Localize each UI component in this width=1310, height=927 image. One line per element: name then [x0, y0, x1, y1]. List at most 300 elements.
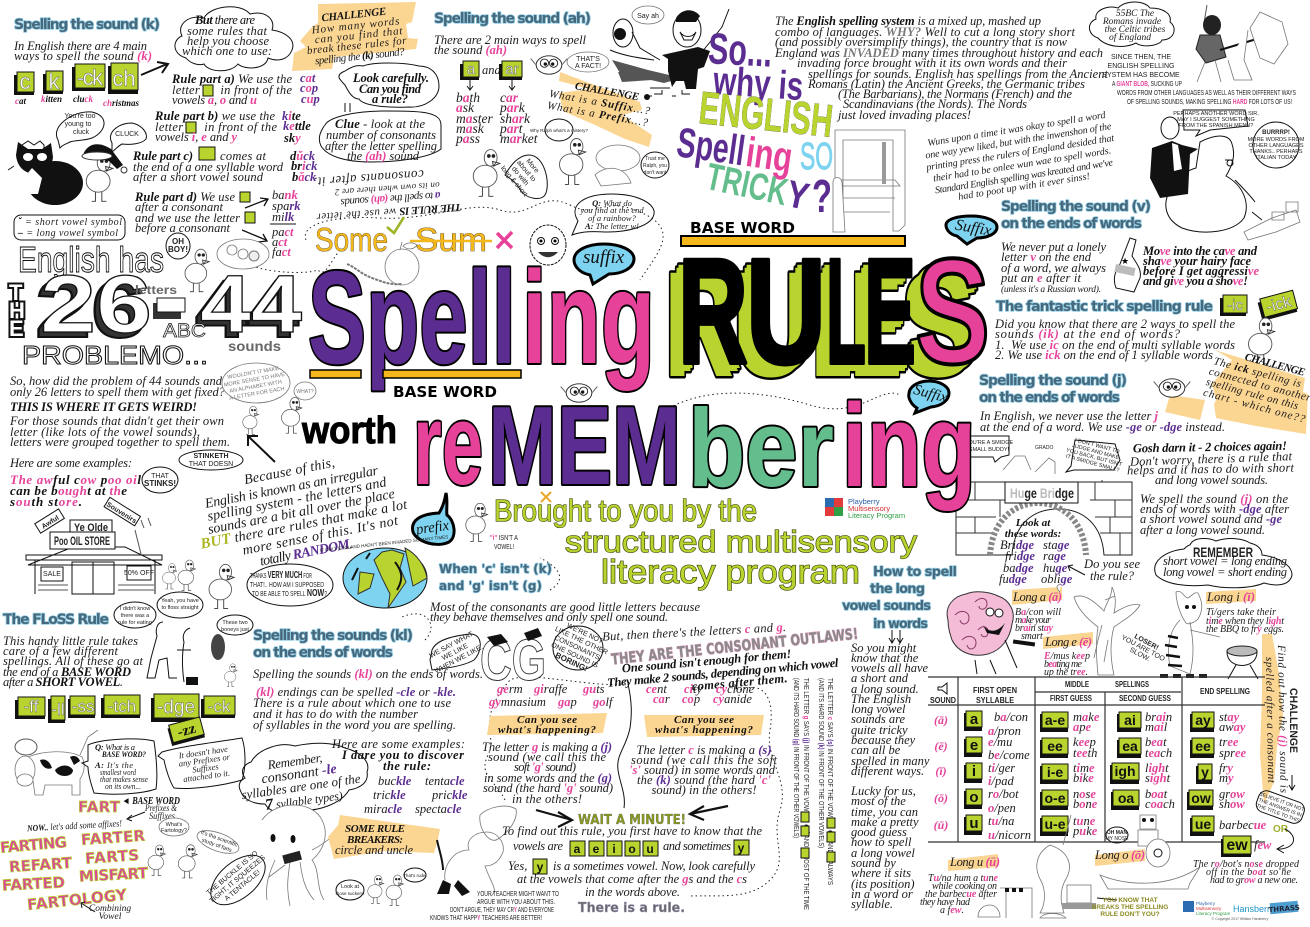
rules shadow fill: [664, 232, 983, 408]
so why is english spelling so tricky: [674, 24, 835, 222]
people and bubbles: rule for eating: [118, 620, 152, 626]
bubble: say ah: Say ah: [637, 13, 659, 20]
bubble: you're too young to cluck: You're too: [64, 113, 96, 120]
paragraph: lucky for us: time, you can: [851, 805, 918, 819]
rule part d: bank: [272, 188, 298, 202]
text: 2 ways: sounds (ik) at the end of words?: [995, 327, 1181, 341]
rules shadow fill: U: [732, 240, 812, 408]
icon: tuna chef: [978, 815, 1071, 918]
icon: chick: [209, 564, 234, 609]
rules shadow outline: S: [906, 235, 981, 403]
label: abc: ABC: [163, 321, 206, 342]
icon: robot: [1106, 815, 1158, 846]
note: i isn't a vowel: VOWEL!: [494, 544, 514, 551]
vertical: the: H: [9, 298, 25, 323]
word lists: ask: [456, 100, 475, 115]
text: 2 ways: Did you know that there are 2 ways to spell the: [994, 317, 1235, 331]
rule part a: cop: [300, 81, 318, 95]
end spelling column: OR: [1273, 824, 1289, 835]
heading: j sound: Spelling the sound (j): [979, 373, 1127, 389]
title: rememebering: [413, 379, 976, 512]
words: fart family: REFART: [8, 854, 73, 876]
text: we spell the sound j: [1140, 492, 1289, 537]
second guess column: light: [1145, 761, 1169, 775]
paragraph: because of this: more sense of this. It's not: [241, 514, 400, 559]
legend: vowel symbols: [14, 215, 125, 240]
rainbow joke bubble: [572, 194, 654, 235]
rules front: S: [915, 227, 990, 395]
long a: smart.: [1021, 631, 1045, 642]
vertical notes: (AND ITS HARD SOUND (g) IN FRONT OF THE OTHER VOWELS): [792, 678, 799, 838]
highlight: some rule breakers: BREAKERS:: [346, 834, 403, 846]
label: base word top: BASE WORD: [690, 219, 795, 237]
text: you know that: BREAKS THE SPELLING: [1092, 904, 1168, 911]
people and bubbles: to floss straight: [162, 605, 199, 611]
text: letter g: The letter g is making a (j): [482, 740, 612, 754]
text: yes y: [508, 859, 755, 899]
examples: buckle: [378, 774, 412, 788]
rule part d: before a consonant: [135, 221, 231, 235]
table headings: SECOND GUESS: [1119, 694, 1172, 703]
playberry logo: Multisensory: [848, 504, 890, 513]
key tiles: floss: -ck: [208, 697, 231, 716]
bridge with words: stage: [1043, 538, 1070, 552]
rule part a: cat: [300, 71, 316, 85]
sign: poo oil store: [50, 532, 115, 549]
bubbles above bridge: YOU'RE A SMIDGE: [965, 440, 1014, 446]
heading: j sound: [979, 373, 1127, 406]
rules shadow fill: R: [664, 240, 734, 408]
question: do you see the rule: the rule?: [1090, 569, 1135, 583]
c words: cent: [646, 682, 667, 696]
word: fart base word: [26, 796, 180, 834]
first open syllable column: ti/ger: [988, 761, 1015, 775]
how to spell long vowels: [842, 565, 957, 632]
text: kl endings: (kl) endings can be spelled -cle or -kle.: [256, 685, 456, 699]
rules shadow outline: E: [856, 235, 908, 403]
paragraph: wuns upon a time: their had to be onlee wun wae to spell words.: [932, 145, 1112, 185]
paragraph: english spelling system: (and possibly oversimplify things), the country that is now: [775, 35, 1068, 49]
bubble: clue: [319, 103, 441, 163]
icon: tiger: [1160, 591, 1220, 676]
upside-down rule text: [313, 165, 462, 223]
text: since then: SINCE THEN, THE: [1111, 54, 1171, 61]
paragraph: so you might: can all be: [851, 743, 901, 757]
heading: fantastic trick: The fantastic trick spelling rule: [996, 299, 1213, 315]
text: you know that: RULE DON'T YOU?: [1100, 911, 1160, 918]
bird and bubbles: Trust me: [645, 156, 665, 162]
example: awful cow poo oil: can be bought at the: [10, 483, 127, 498]
example words: kitten: [41, 94, 62, 104]
label: base word lower: BASE WORD: [393, 383, 497, 401]
wait a minute: [536, 806, 728, 828]
chicks and bubble: WOULDN'T IT MAKE: [227, 366, 280, 381]
long e: beating me: [1044, 659, 1083, 670]
people and bubbles: [114, 592, 253, 687]
text: letter c: the (k) sound (the hard 'c': [637, 773, 772, 787]
text: kl endings: There is a rule about which one to use: [253, 696, 451, 710]
paragraph: so you might: a long sound.: [851, 682, 919, 696]
panel: english has 26 44: [9, 239, 302, 370]
text: you know that: YOU KNOW THAT: [1102, 897, 1158, 904]
paragraph: those sounds: letter (like lots of the vowel sounds),: [10, 425, 200, 439]
second guess column: coach: [1145, 797, 1175, 811]
paragraph: how fixed: So, how did the problem of 44 sounds and: [10, 374, 223, 388]
rule part c: Rule part c): [132, 149, 193, 163]
text: letter g: sound (the hard 'g' sound): [483, 781, 613, 795]
long o: Long o (ō): [1094, 848, 1145, 862]
text: yes y: at the vowels that come after the gs and the cs: [517, 872, 747, 886]
words: fart family: MISFART: [79, 864, 149, 886]
text: we spell the sound j: We spell the sound (j) on the: [1140, 492, 1288, 506]
text: letter g: soft 'g' sound): [514, 760, 576, 774]
rule part c: dŭck: [290, 149, 316, 163]
text: your teacher: DON'T ARGUE, THEY MAY CRY AND EVERYONE: [450, 907, 554, 914]
upside-down rule text: consonants after it.: [314, 167, 424, 190]
long a: [1012, 587, 1062, 642]
g words: guts: [582, 682, 605, 696]
paragraph: because of this: Because of this,: [243, 456, 336, 488]
icon: bird eye and fact bubble: THAT'S: [576, 56, 600, 63]
text: robot's nose: The ro/bot's nose dropped: [1193, 859, 1300, 870]
words: fart family: FARTS: [85, 846, 140, 868]
paragraph: because of this: English is known as an irregular: [203, 464, 380, 512]
rhyme: move into the cave: and give you a shove!: [1143, 274, 1248, 288]
example words: cat: [15, 96, 26, 106]
c words: cyanide: [713, 692, 752, 706]
long u: a few.: [940, 905, 964, 916]
key tiles a and ar: and: [482, 63, 502, 77]
heading: sound k: Spelling the sound (k): [14, 17, 160, 33]
panel: j sound: [956, 373, 1295, 588]
second guess column: ai: [1124, 712, 1136, 728]
word: fart base word: FART: [78, 798, 121, 816]
text: since then: ENGLISH SPELLING: [1108, 63, 1174, 70]
g words: golf: [592, 695, 614, 709]
long a: brain stay: [1015, 623, 1054, 634]
text: floss rule: after a SHORT VOWEL.: [3, 675, 123, 689]
text: kl endings: [253, 667, 483, 732]
icon: bird with eyes: [561, 384, 597, 402]
logo: playberry small: Playberry: [1196, 901, 1216, 906]
arrow to chicks: [248, 436, 275, 462]
bubble: we're not like: LIKE THE OTHER: [554, 626, 609, 657]
bubble: what is a base word: A: It's the: [94, 760, 133, 770]
paragraph: because of this: spelling system - the letters and: [206, 475, 389, 525]
tile: ew few: ew: [1226, 837, 1248, 854]
highlight: can you see right: what's happening?: [655, 724, 754, 736]
bridge with words: Look at: [1015, 517, 1051, 529]
how to spell long vowels: the long: [870, 582, 925, 597]
playberry logo: Playberry: [848, 497, 880, 506]
second guess column: oa: [1118, 790, 1134, 806]
key tiles: floss: [15, 694, 235, 746]
cloud: remember: [1155, 538, 1292, 588]
icon: globe map: [320, 534, 448, 608]
challenge: break these rules: can you find that: [314, 25, 404, 46]
text: your teacher: [430, 891, 559, 922]
bubbles: flamingo birds: [335, 868, 427, 906]
bubble: you're too young to cluck: [56, 112, 104, 148]
line: structured: structured multisensory: [565, 524, 918, 559]
bird and bubbles: More: [524, 158, 540, 175]
paragraph: so you might: vowels all have: [851, 661, 929, 675]
bridge with words: these words:: [1005, 528, 1061, 540]
paragraph: so you might: long vowel: [851, 702, 906, 716]
long i: Ti/gers take their: [1206, 607, 1276, 618]
when c isn't k: When 'c' isn't (k): [439, 562, 552, 576]
label: sounds: sounds: [228, 338, 281, 354]
bubbles above bridge: JUDGE AND MAKE: [1071, 443, 1120, 461]
word lists: mask: [456, 121, 485, 136]
paragraph: english spelling system: just loved invading places!: [836, 108, 971, 122]
rule part b: vowels i, e and y: [155, 130, 237, 144]
vowels row: o: [628, 842, 636, 856]
rules front: R: [678, 227, 748, 395]
bubble: you're too young to cluck: cluck: [73, 129, 89, 136]
panel: long vowel text: [850, 630, 930, 911]
bubble: buckle is so tight: TIGHT, IT SQUEEZES: [209, 854, 267, 905]
long a: Long a (ā): [1012, 590, 1062, 604]
example: awful cow poo oil: The awful cow poo oil: [10, 472, 141, 487]
text: letter c: sound) in the others!: [652, 783, 756, 797]
icon: cat with crown: [8, 141, 83, 205]
icon: roman and celt: [1196, 5, 1288, 82]
bubble: burp: BURRRP!: [1262, 130, 1290, 136]
paragraph: lucky for us: Lucky for us,: [850, 784, 916, 798]
rules shadow fill: E: [850, 240, 902, 408]
paragraph: so you might: know that the: [851, 651, 919, 665]
second guess column: beat: [1145, 735, 1167, 749]
text: never use j: [979, 409, 1225, 434]
icon: diver and shark: [437, 806, 516, 896]
icon: vodka bottle: [1114, 238, 1140, 292]
bubble: we say what: WE LIKE: [441, 643, 470, 662]
bubble: cluck: [110, 123, 146, 152]
bubble: what is a base word: smallest word: [100, 767, 137, 777]
arrows down: [889, 630, 903, 643]
vertical notes: THE LETTER g SAYS (j) IN FRONT OF THE VOWELS e i AND y MOST OF THE TIME: [802, 678, 811, 910]
bird and bubbles: Ralph, you: [643, 163, 667, 169]
cloud: remember consonant le: consonant -le: [261, 762, 338, 787]
paragraph: english spelling system: Romans (Latin) the Ancient Greeks, the Germanic tribes: [807, 77, 1085, 91]
word: why is: why is: [711, 59, 805, 109]
rules front: E: [864, 227, 916, 395]
text: letter c: [629, 743, 778, 797]
bubble: what is a base word: Q: What is a: [95, 742, 135, 752]
bubbles: flamingo birds: That's rude!: [403, 873, 427, 878]
rainbow joke bubble: Q: What do: [592, 198, 632, 208]
bold: this is where it gets weird: THIS IS WHERE IT GETS WEIRD!: [10, 400, 197, 414]
rule part d: after a consonant: [135, 200, 224, 214]
rule part d: act: [272, 235, 288, 249]
cloud: remember consonant le: 7 syllable types): [264, 786, 344, 814]
rules shadow fill: L: [818, 235, 858, 403]
bubble: what is a base word: that makes sense: [100, 774, 148, 784]
bridge with words: Bridge: [1000, 538, 1034, 552]
table headings: FIRST GUESS: [1050, 694, 1093, 703]
challenge: break these rules: CHALLENGE: [321, 6, 387, 24]
bubble: oh boy: BOY!: [168, 245, 188, 254]
challenge: break these rules: break these rules for: [306, 35, 408, 57]
paragraph: so you might: The English: [851, 692, 911, 706]
base word bar top: [681, 236, 905, 246]
people and bubbles: I didn't know: [120, 606, 150, 612]
text: kl endings: Spelling the sounds (kl) on the ends of words.: [253, 667, 483, 681]
bubble: buckle is so tight: [202, 846, 274, 914]
text: your teacher: KNOWS THAT HAPPY TEACHERS ARE BETTER!: [430, 915, 542, 922]
logo: hansberry: Hansberry: [1233, 904, 1275, 914]
paragraph: wuns upon a time: Wuns upon a time it was okay to spell a word: [927, 110, 1107, 149]
bubble: cluck: CLUCK: [115, 131, 139, 138]
first open syllable column: a/pron: [988, 724, 1021, 738]
heading: kl: [253, 628, 413, 661]
word: ber: ber: [688, 387, 834, 510]
rule part c: the end of a one syllable word: [133, 160, 284, 174]
examples: [331, 737, 468, 816]
tile: ew few: [1221, 829, 1294, 857]
sign: ye olde: Ye Olde: [74, 522, 108, 534]
first guess column: o-e: [1044, 790, 1066, 806]
word: tricky: Y: [783, 173, 813, 219]
word lists: part: [499, 121, 524, 136]
text: since then: OF SPELLING SOUNDS, MAKING SPELLING HARD FOR LOTS OF US!: [1127, 99, 1292, 106]
paragraph: lucky for us: good guess: [851, 825, 907, 839]
paragraph: english spelling system: combo of languages. WHY? Well to cut a long story short: [775, 25, 1076, 39]
first open syllable column: ro/bot: [988, 787, 1019, 801]
vertical: the: E: [9, 316, 24, 341]
bubble: we're not like: WE'RE NOT: [565, 623, 604, 646]
intro: consonants: they behave themselves and only spell one sound.: [430, 610, 668, 624]
note: believe it or not: BELIEVE IT OR NOT,: [1258, 791, 1306, 813]
text: robot's nose: had to grow a new one.: [1210, 875, 1298, 886]
vowels row: [513, 839, 749, 856]
end spelling column: ay: [1195, 712, 1211, 728]
end spelling column: show: [1219, 797, 1245, 811]
bird and bubbles: [473, 119, 669, 198]
arrow: [141, 62, 168, 75]
paragraph: english spelling system: The English spelling system is a mixed up, mashed up: [775, 14, 1041, 28]
shop illustration: Souvenirs: [105, 501, 137, 525]
long e: up the tree.: [1044, 667, 1088, 678]
key tiles: floss: -ll: [51, 700, 65, 719]
word lists: master: [456, 111, 493, 126]
first guess column: u-e: [1044, 816, 1066, 832]
c words: car: [653, 692, 670, 706]
text: v rule: (unless it's a Russian word).: [1001, 284, 1101, 295]
tile: ew few: few: [1254, 838, 1272, 852]
text: letter g: [482, 740, 613, 806]
first guess column: nose: [1073, 787, 1096, 801]
bridge with words: [956, 480, 1132, 586]
long i: [1206, 589, 1284, 635]
suffix bubble 1: [574, 244, 634, 284]
end spelling column: y: [1201, 764, 1209, 780]
g words: [488, 682, 614, 709]
highlight: can you see right: Can you see: [674, 714, 734, 726]
bubbles: flamingo birds: those suckers!: [335, 891, 365, 896]
icon: robot in boat: [1100, 839, 1200, 889]
paragraph: lucky for us: most of the: [851, 794, 906, 808]
bubbles: that stinks: STINKS!: [144, 479, 176, 488]
rules shadow outline: U: [740, 232, 820, 400]
long i: Long i (ī): [1206, 590, 1255, 604]
how to spell long vowels: vowel sounds: [842, 599, 931, 614]
playberry logo: Literacy Program: [848, 511, 905, 520]
cloud: 55BC: Romans invade: [1102, 17, 1161, 27]
bubble: no prefixes: attached to it.: [183, 768, 230, 784]
intro: sound ah: [434, 33, 587, 57]
bubble: thanks very much: THAT!.. HOW AM I SUPPOSED: [250, 582, 324, 589]
bubble: we're not like: ONE SOUND IS: [550, 642, 599, 670]
paragraph: wuns upon a time: one way yew liked, but with the inwenshon of the: [925, 121, 1113, 161]
text: one sound isn't enough: [605, 643, 840, 701]
panel: consonant outlaws: [426, 600, 859, 922]
bubble: we're not like: CONSONANTS,: [553, 634, 603, 662]
first open syllable column: u: [969, 815, 979, 832]
logo: playberry small: Literacy Program: [1196, 911, 1231, 916]
upside-down rule text: we use the letter: [315, 205, 397, 223]
bubble: buckle is so tight: A TENTACLE!: [224, 869, 262, 903]
text: to find out: To find out this rule, you first have to know that the: [502, 824, 762, 838]
vertical notes: (AND ITS HARD SOUND (k) IN FRONT OF THE OTHER VOWELS): [817, 678, 824, 848]
key tiles a and ar: a: [467, 61, 476, 78]
paragraph: those sounds: [9, 414, 230, 470]
icon: bird eye and fact bubble: A FACT!: [575, 63, 601, 70]
rules shadow fill: E: [856, 235, 908, 403]
bubble: oh boy: OH: [172, 237, 184, 246]
cross mark: [541, 492, 551, 502]
paragraph: because of this: totally RANDOM.: [259, 537, 354, 570]
g words: gap: [557, 695, 577, 709]
chicks and bubble: [222, 363, 316, 434]
big 26: 26: [35, 264, 147, 355]
icon: robot: OH MAN: [1107, 830, 1128, 836]
text: yes y: is a sometimes vowel. Now, look carefully: [553, 859, 755, 873]
rhyme: move into the cave: [1142, 244, 1259, 288]
paragraph: how fixed: [10, 374, 226, 399]
bubbles: fartology: [148, 818, 242, 878]
table headings: SYLLABLE: [976, 696, 1015, 705]
rules shadow outline: E: [858, 232, 910, 400]
challenge cloud: look carefully: a rule?: [372, 92, 408, 106]
text: letter c: 's' sound) in some words and: [629, 763, 776, 777]
sound column: (ā): [934, 713, 948, 727]
text: v rule: of a word, we always: [1001, 261, 1106, 275]
text: kl endings: and it has to do with the number: [253, 707, 418, 721]
end spelling column: fry: [1219, 761, 1233, 775]
line: literacy program: literacy program: [601, 553, 860, 590]
icon: cow: [15, 730, 98, 795]
key tiles: c k ck ch: ch: [112, 66, 136, 91]
table headings: END SPELLING: [1200, 687, 1250, 696]
rule part d: spark: [272, 199, 301, 213]
rule part a: cup: [301, 92, 320, 106]
table headings: [930, 680, 1250, 705]
how to spell long vowels: in words: [873, 617, 928, 632]
bubbles: that stinks: [142, 450, 243, 493]
long u: while cooking on: [932, 881, 997, 892]
text: since then: SYSTEM HAS BECOME: [1102, 72, 1180, 79]
rules shadow outline: L: [818, 235, 858, 403]
shop illustration: 50% OFF: [124, 570, 154, 577]
long e: Long e (ē): [1044, 635, 1092, 649]
prefix bubble: [413, 493, 454, 544]
heading: english has: English has: [18, 239, 164, 280]
paragraph: english spelling system: [774, 14, 1109, 122]
cloud: 55BC: 55BC The: [1116, 9, 1154, 19]
rules shadow fill: E: [858, 232, 910, 400]
